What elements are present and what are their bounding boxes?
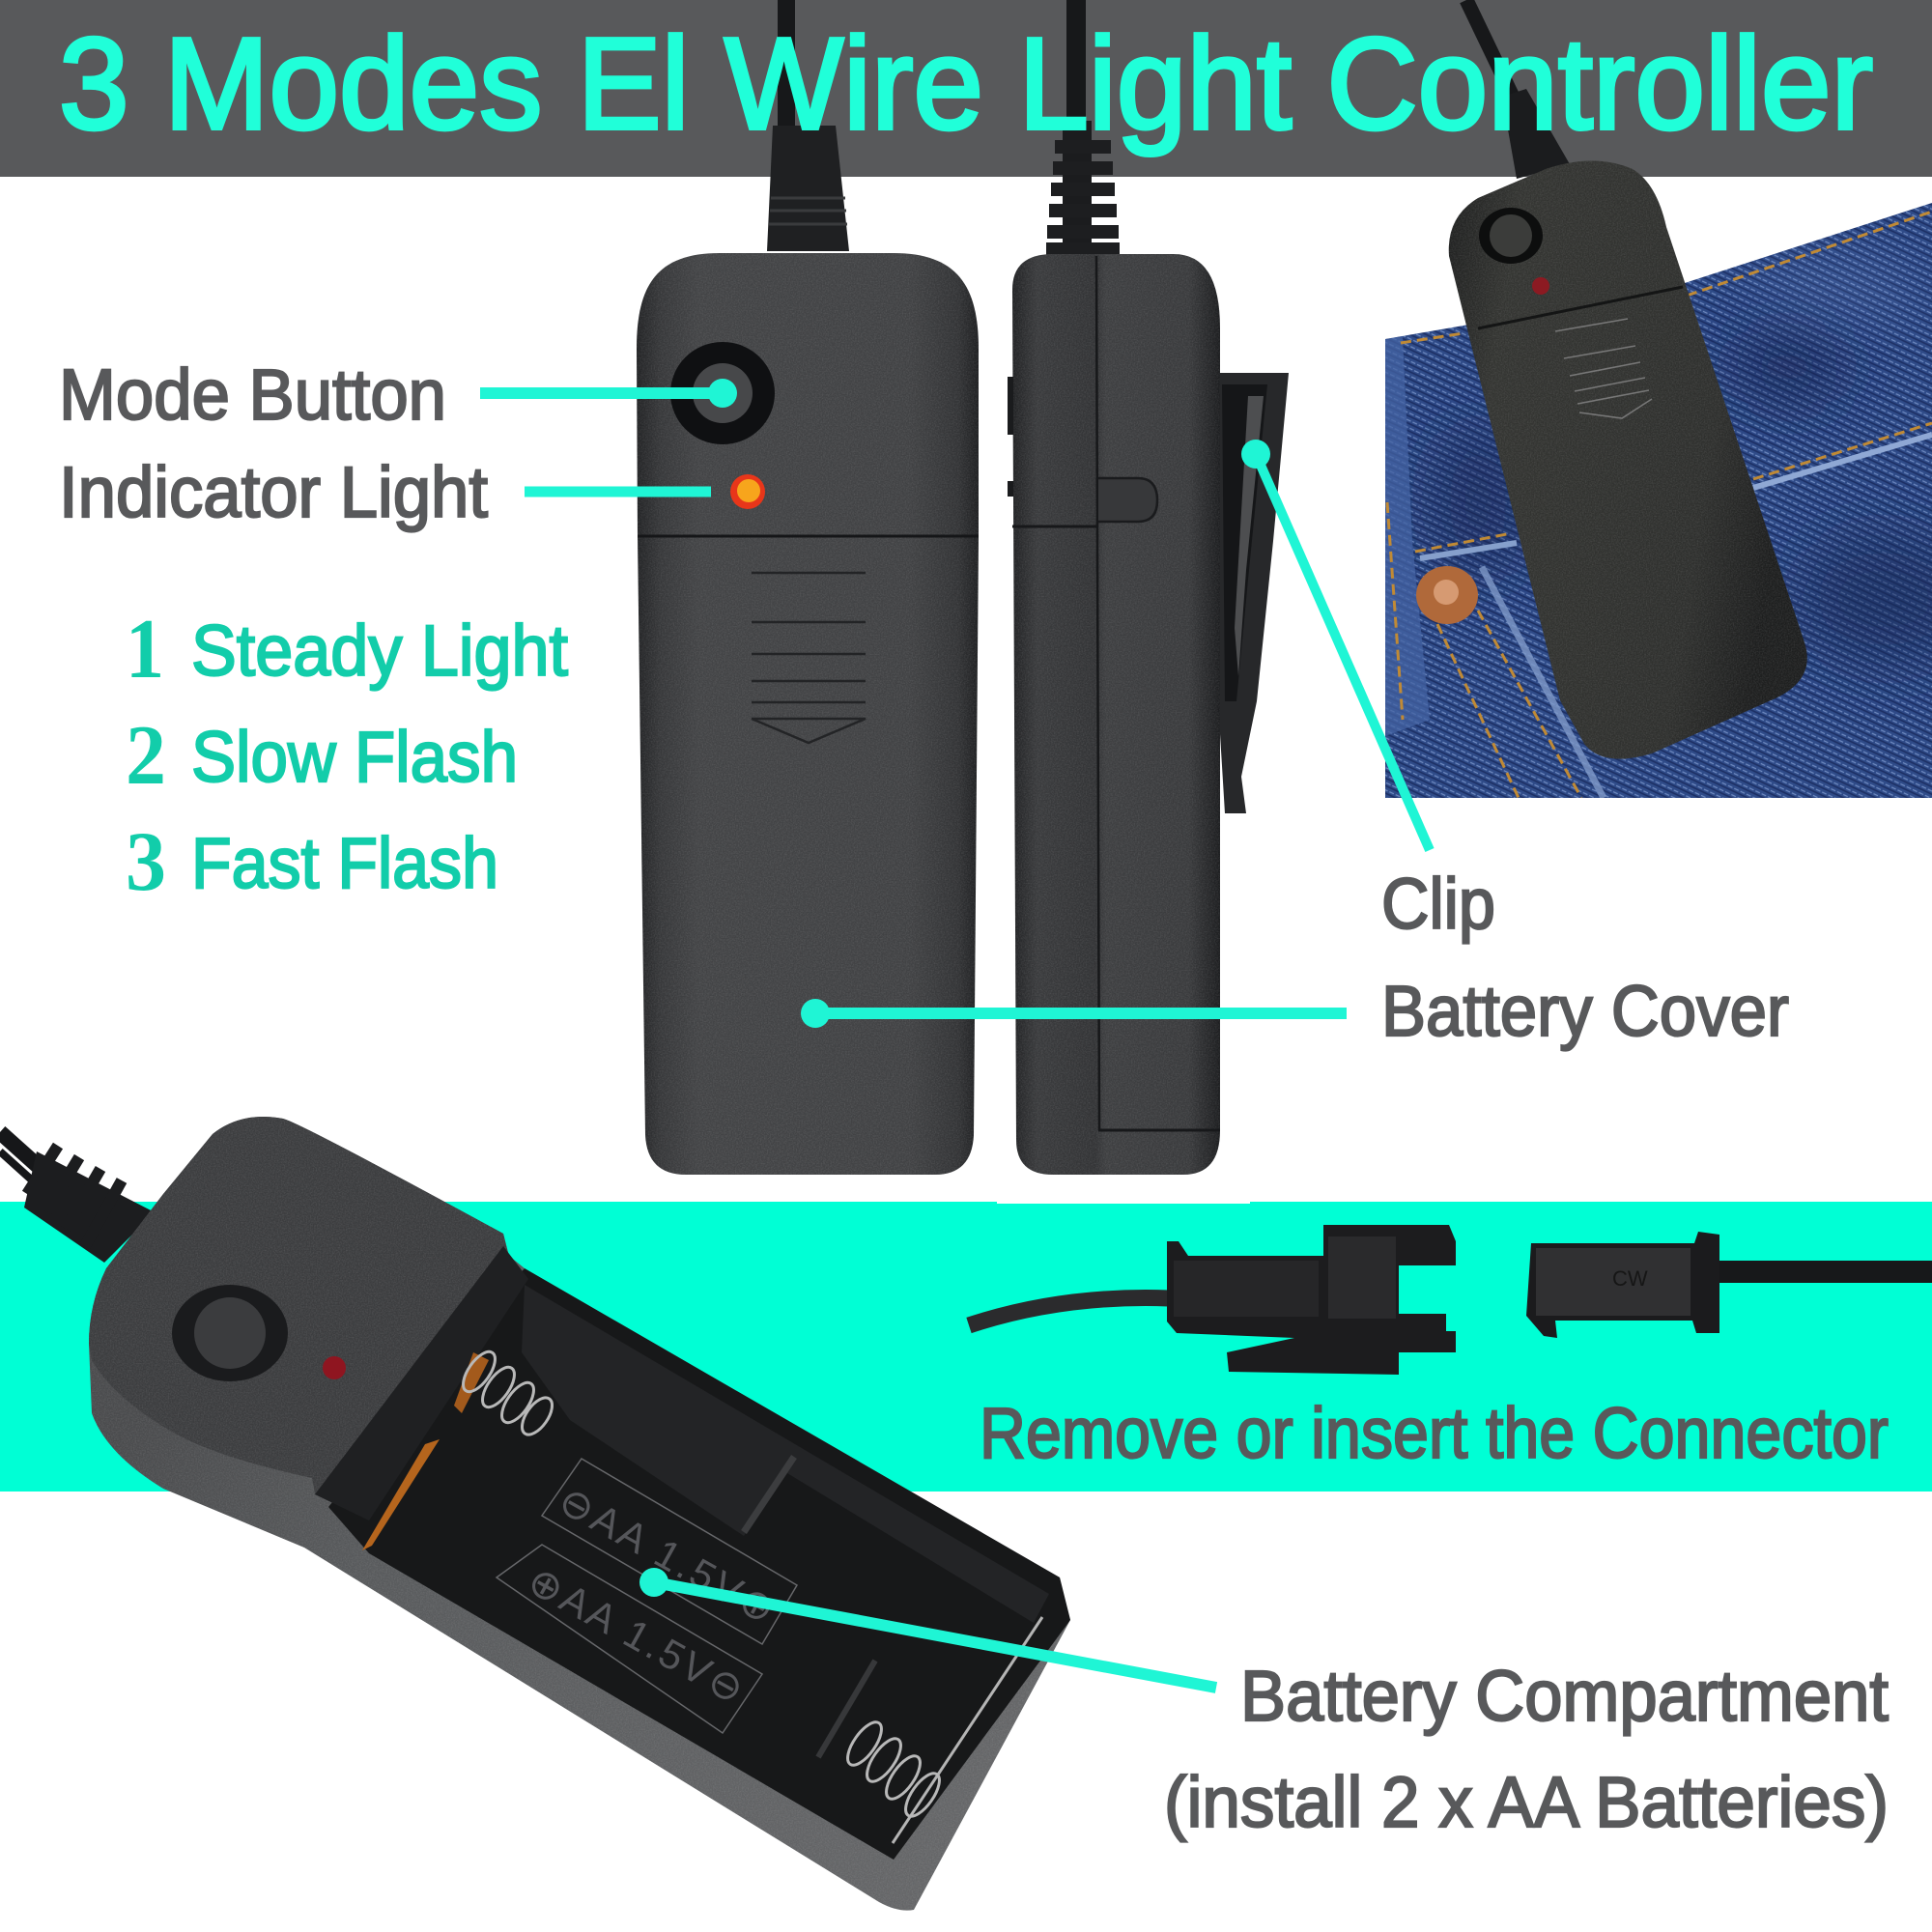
callout line: clip — [1241, 440, 1430, 850]
device: front view — [637, 253, 979, 1175]
cap top face — [89, 1117, 509, 1494]
mode button — [670, 342, 775, 444]
compartment interior — [328, 1268, 1070, 1860]
label: mode button: Mode Button — [59, 355, 446, 435]
orange contact strip — [362, 1439, 440, 1550]
label: battery compartment: Battery Compartment — [1240, 1656, 1889, 1736]
device: on jeans — [1449, 160, 1807, 759]
connector: left plug with wire — [969, 1225, 1456, 1375]
spring one — [457, 1347, 558, 1439]
indicator LED — [730, 474, 765, 509]
label: install batteries note: (install 2 x AA Batteries) — [1164, 1762, 1889, 1842]
mode 1: 1 — [126, 603, 164, 696]
device: side view with clip — [1008, 254, 1289, 1175]
copper rivet — [1416, 566, 1478, 624]
mode list — [126, 603, 568, 909]
moulded AA battery markings — [497, 1459, 797, 1733]
moulded AA battery markings: ⊕AA 1.5V⊖ — [521, 1557, 752, 1713]
mode 2 — [126, 709, 518, 803]
title bar background — [0, 0, 1932, 177]
spring two — [841, 1717, 946, 1822]
label: clip: Clip — [1381, 864, 1495, 944]
mode 3: 3 — [126, 815, 166, 909]
mode 1: Steady Light — [191, 611, 568, 691]
mode 3 — [126, 815, 498, 909]
callout line: mode button — [480, 379, 737, 408]
belt clip — [1220, 373, 1289, 813]
mode button — [172, 1285, 288, 1381]
denim stitching — [1387, 212, 1932, 798]
device: open battery compartment — [0, 1117, 1070, 1911]
wires and strain relief — [0, 1132, 155, 1263]
teal connector band — [0, 1201, 1932, 1492]
callout line: indicator light — [525, 487, 711, 497]
mode 2: Slow Flash — [191, 717, 518, 797]
side pill detail — [1098, 478, 1157, 522]
connector: right socket with wire — [1526, 1232, 1932, 1338]
indicator LED — [323, 1356, 346, 1379]
photo: controller clipped on jeans — [1385, 193, 1932, 802]
moulded AA battery markings: ⊖AA 1.5V⊕ — [552, 1477, 782, 1633]
label: indicator light: Indicator Light — [59, 452, 488, 532]
callout line: battery cover — [801, 999, 1347, 1028]
mode 3: Fast Flash — [191, 823, 498, 903]
mode 2: 2 — [126, 709, 166, 803]
callout line: battery compartment — [639, 1568, 1216, 1688]
label: battery cover: Battery Cover — [1381, 971, 1789, 1051]
title: 3 Modes El Wire Light Controller — [59, 11, 1873, 156]
connector: right socket with wire: CW — [1612, 1266, 1648, 1291]
battery cover grip — [752, 573, 866, 743]
cords and strain reliefs — [767, 0, 1570, 251]
